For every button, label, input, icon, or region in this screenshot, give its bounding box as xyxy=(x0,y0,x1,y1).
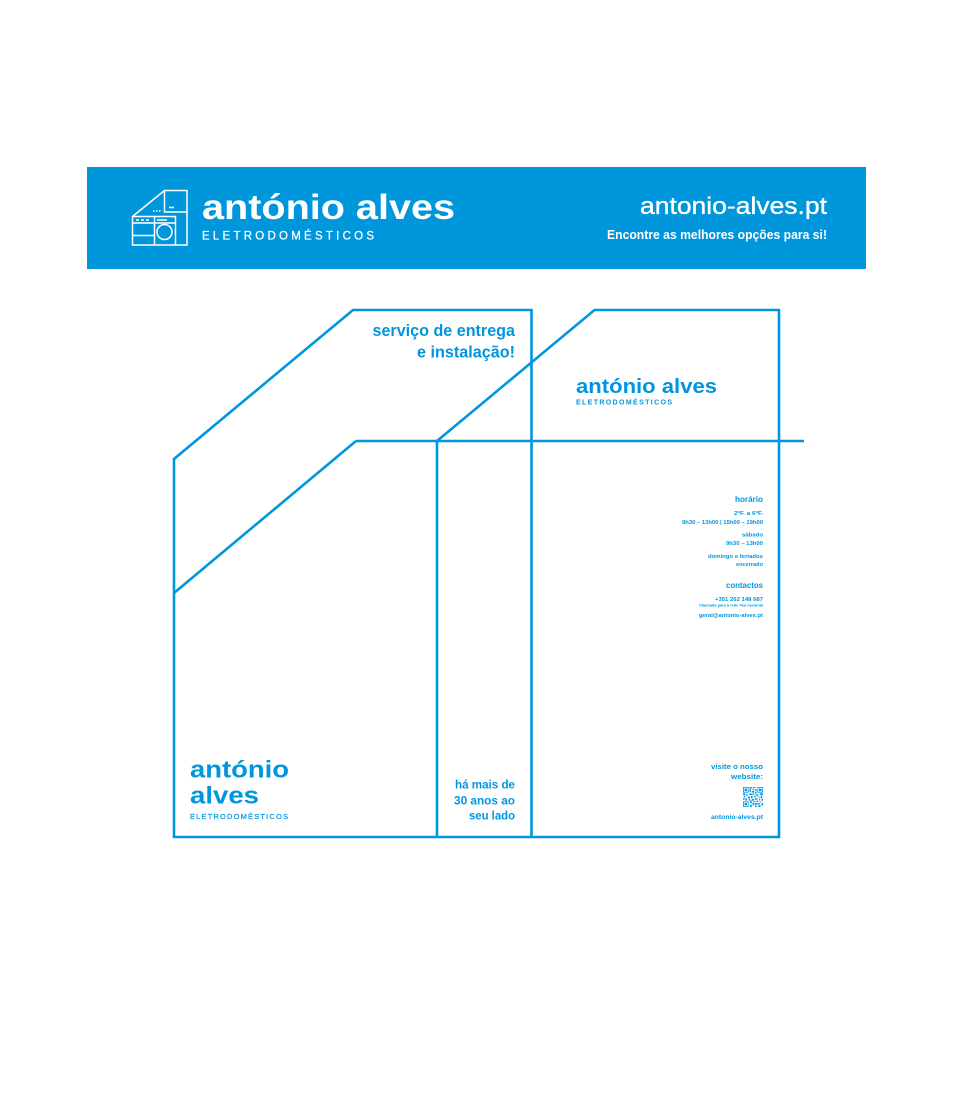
opening hours: 9h30 – 13h00 xyxy=(726,541,763,547)
delivery slogan: serviço de entrega xyxy=(372,321,516,340)
opening hours: 2ªF. a 6ªF. xyxy=(734,510,764,517)
header banner xyxy=(87,167,866,269)
logo on front cover: ELETRODOMÉSTICOS xyxy=(190,812,288,821)
contacts: Chamada para a rede fixa nacional xyxy=(699,604,763,608)
opening hours: domingo e feriados xyxy=(708,554,763,560)
brand subtitle: ELETRODOMÉSTICOS xyxy=(202,230,374,242)
logo on flap xyxy=(576,376,717,406)
contacts: contactos xyxy=(726,581,764,590)
brand name: antónio alves xyxy=(202,188,455,227)
website prompt: website: xyxy=(730,772,763,781)
logo on front cover: alves xyxy=(190,782,259,810)
logo on flap: antónio alves xyxy=(576,376,717,398)
icon: QR code xyxy=(743,787,763,807)
logo on front cover xyxy=(190,756,289,821)
opening hours: horário xyxy=(735,495,763,504)
experience slogan: seu lado xyxy=(469,808,515,822)
opening hours: sábado xyxy=(742,532,764,538)
opening hours: 9h30 – 13h00 | 15h00 – 19h00 xyxy=(682,520,763,526)
website address: antonio-alves.pt xyxy=(640,193,827,220)
delivery slogan: e instalação! xyxy=(417,342,515,362)
opening hours xyxy=(682,495,764,568)
logo on flap: ELETRODOMÉSTICOS xyxy=(576,398,672,406)
experience slogan xyxy=(454,778,515,822)
website prompt: visite o nosso xyxy=(711,762,763,771)
website prompt xyxy=(711,762,763,781)
delivery slogan xyxy=(372,321,516,362)
logo on front cover: antónio xyxy=(190,756,289,784)
opening hours: encerrado xyxy=(736,562,764,568)
contacts xyxy=(699,581,764,619)
experience slogan: há mais de xyxy=(455,778,515,792)
icon: kitchen appliances xyxy=(132,190,187,245)
tagline: Encontre as melhores opções para si! xyxy=(607,227,827,242)
contacts: geral@antonio-alves.pt xyxy=(699,613,763,619)
folder dieline outline xyxy=(173,310,804,837)
experience slogan: 30 anos ao xyxy=(454,794,515,808)
contacts: +351 262 148 687 xyxy=(715,597,763,603)
website link: antonio-alves.pt xyxy=(711,814,764,821)
